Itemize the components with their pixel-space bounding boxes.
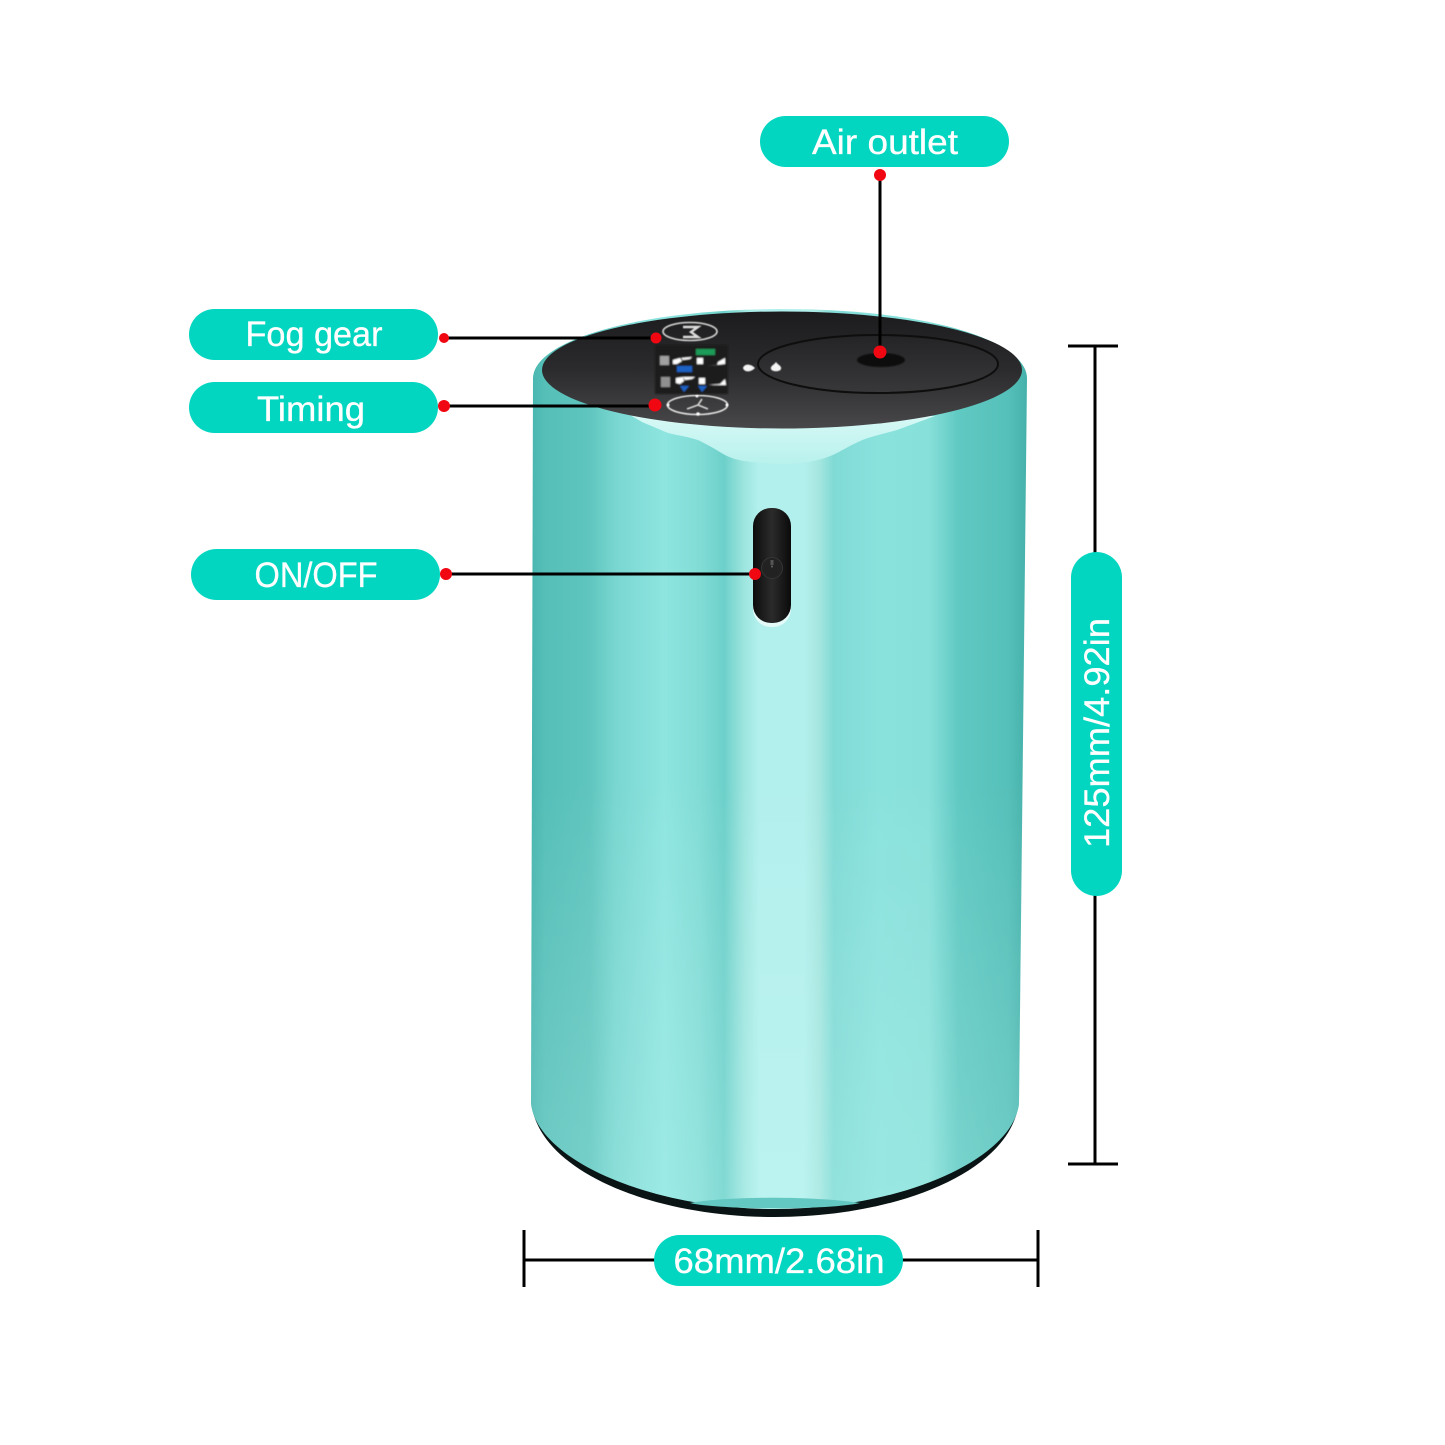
callout: Timing xyxy=(189,382,662,433)
body lower light sheen xyxy=(531,780,1023,1209)
device body xyxy=(531,309,1027,1209)
dimension: height xyxy=(1068,346,1122,1164)
callout: Fog gear xyxy=(189,309,662,360)
timing button icon xyxy=(666,394,728,416)
droplet icons xyxy=(743,362,781,371)
dimension: height: 125mm/4.92in xyxy=(1078,618,1117,848)
body top notch highlight xyxy=(630,415,935,464)
dimension: width xyxy=(524,1230,1038,1287)
display screen xyxy=(655,345,728,394)
callout: ON/OFF xyxy=(191,549,761,600)
power button xyxy=(753,508,791,627)
device base shadow xyxy=(531,1100,1019,1217)
callout: Air outlet xyxy=(760,116,1009,358)
callout: ON/OFF: ON/OFF xyxy=(254,556,378,595)
body bottom notch xyxy=(690,1198,860,1208)
dimension: width: 68mm/2.68in xyxy=(674,1242,884,1281)
callout: Fog gear: Fog gear xyxy=(246,315,383,354)
air outlet lid xyxy=(758,335,998,393)
callout: Timing: Timing xyxy=(257,390,365,429)
device top panel xyxy=(542,312,1022,428)
callout: Air outlet: Air outlet xyxy=(812,123,958,162)
device: aroma diffuser xyxy=(531,309,1027,1217)
air outlet hole xyxy=(857,353,905,367)
fog gear button icon xyxy=(663,322,717,340)
